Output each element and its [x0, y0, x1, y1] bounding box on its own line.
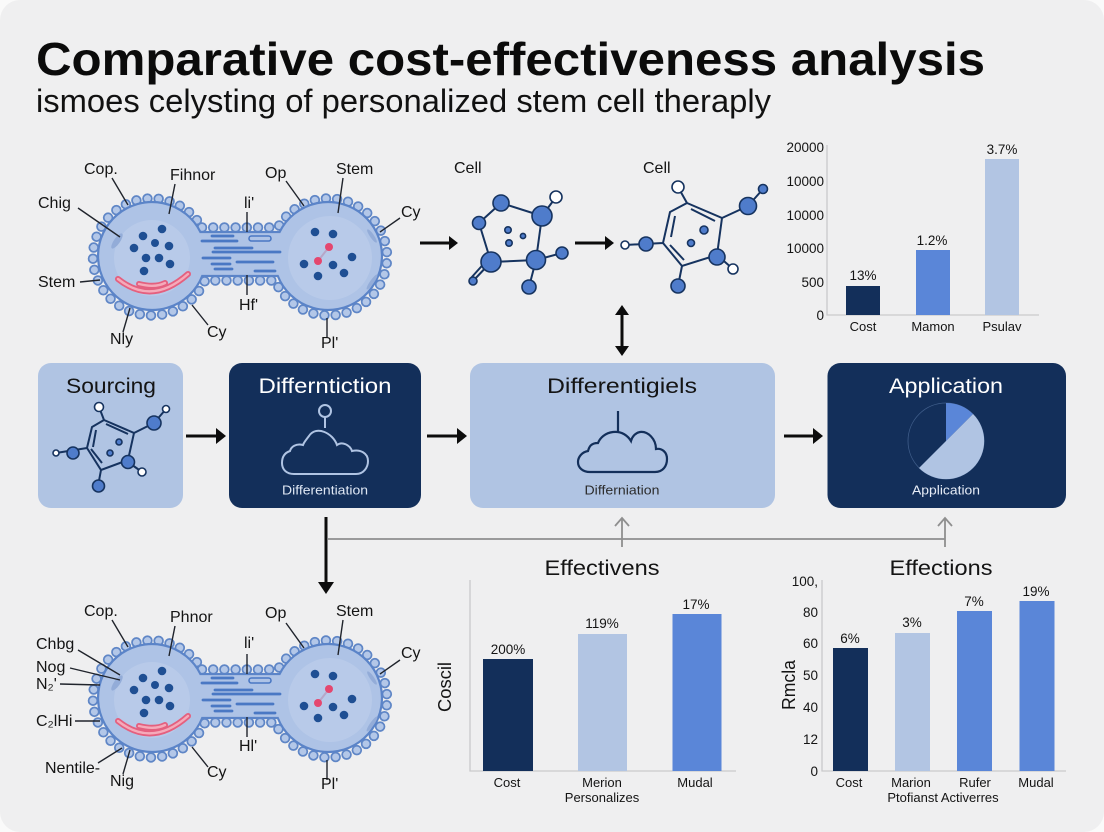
cell labels: Stem — [336, 161, 373, 178]
value labels — [849, 142, 1017, 283]
label: cell: Cell — [454, 160, 482, 177]
diagram: top stem cell — [38, 161, 421, 352]
pink crescent — [118, 274, 188, 291]
value labels — [491, 597, 710, 657]
cell labels: Cy — [401, 204, 421, 221]
y axis title: Rmcla — [779, 659, 799, 710]
cell labels: Nog — [36, 659, 65, 676]
leader lines — [78, 178, 400, 338]
cell labels: Stem — [336, 603, 373, 620]
value labels: 1.2% — [917, 233, 947, 248]
category labels: Cost — [494, 775, 521, 790]
cell labels — [38, 161, 421, 352]
arrow: molecule to molecule — [575, 236, 614, 250]
cell labels: Cy — [401, 645, 421, 662]
arrow: middle panel to application — [784, 428, 823, 444]
bar chart: top right — [786, 140, 1039, 334]
y axis labels: 100, — [792, 574, 818, 589]
cell labels: Nentile- — [45, 760, 100, 777]
y axis labels: 0 — [816, 308, 824, 323]
cell labels: Chig — [38, 195, 71, 212]
category labels — [494, 775, 713, 805]
double arrow — [615, 305, 629, 356]
category labels: Cost — [836, 775, 863, 790]
cell labels: Pl' — [321, 335, 338, 352]
arrow: differentiation down — [318, 517, 334, 594]
category labels: Mudal — [677, 775, 713, 790]
y axis labels: 500 — [801, 275, 824, 290]
y axis labels: 50 — [803, 668, 818, 683]
cell shape — [93, 640, 387, 757]
arrow: cell to molecule — [420, 236, 458, 250]
chart heading: Effections — [890, 557, 992, 580]
arrow: sourcing to differentiation — [186, 428, 226, 444]
y axis labels: 12 — [803, 732, 818, 747]
bar chart: effections — [779, 557, 1066, 805]
panel: differentiation dark — [229, 363, 421, 508]
category labels: Psulav — [982, 319, 1022, 334]
cell labels: Pl' — [321, 776, 338, 793]
feedback connector — [328, 518, 952, 547]
category labels: Marion — [891, 775, 931, 790]
value labels — [840, 584, 1050, 646]
y axis labels: 0 — [810, 764, 818, 779]
pie chart — [908, 403, 984, 479]
cell labels: C₂lHi — [36, 713, 72, 730]
category labels — [836, 775, 1054, 805]
subtitle: ismoes celysting of personalized stem cell theraply — [36, 83, 771, 119]
y axis labels: 10000 — [786, 241, 824, 256]
cell labels: Op — [265, 605, 286, 622]
icon: molecule — [53, 402, 170, 492]
panel: differentigiels — [470, 363, 775, 508]
caption: Differentiation — [282, 482, 368, 498]
cell body — [98, 202, 382, 310]
category labels — [850, 319, 1022, 334]
cell labels: N₂' — [36, 676, 57, 693]
category labels: Cost — [850, 319, 877, 334]
panel: application — [828, 363, 1066, 508]
cell labels: Cop. — [84, 603, 118, 620]
bars — [846, 159, 1019, 315]
value labels: 7% — [964, 594, 984, 609]
y axis labels: 10000 — [786, 174, 824, 189]
value labels: 119% — [585, 616, 619, 631]
leader lines — [60, 620, 400, 780]
cell labels: Hl' — [239, 738, 257, 755]
left organelle dots — [130, 225, 174, 275]
arrow: differentiation to middle panel — [427, 428, 467, 444]
y axis labels: 80 — [803, 605, 818, 620]
nuclei — [114, 216, 372, 300]
molecule two — [621, 181, 768, 293]
cell labels: Phnor — [170, 609, 213, 626]
cell labels: li' — [244, 195, 254, 212]
heading: Differentigiels — [547, 375, 697, 398]
y axis labels: 20000 — [786, 140, 824, 155]
right organelle dots — [300, 228, 356, 280]
value labels: 200% — [491, 642, 525, 657]
value labels: 13% — [849, 268, 877, 283]
membrane marks — [109, 228, 379, 291]
cell labels: Nig — [110, 773, 134, 790]
cell labels: Fihnor — [170, 167, 216, 184]
category labels: Personalizes — [565, 790, 640, 805]
cell labels: Hf' — [239, 297, 258, 314]
y axis labels: 60 — [803, 636, 818, 651]
neck filaments — [202, 236, 280, 271]
value labels: 17% — [682, 597, 710, 612]
caption: Application — [912, 482, 980, 498]
heading: Differntiction — [258, 375, 392, 398]
y axis labels: 40 — [803, 700, 818, 715]
cell labels: Cop. — [84, 161, 118, 178]
value labels: 3.7% — [987, 142, 1017, 157]
cell labels: Op — [265, 165, 286, 182]
cell labels: Chbg — [36, 636, 74, 653]
y axis labels — [792, 574, 818, 779]
value labels: 19% — [1022, 584, 1050, 599]
caption: Differniation — [584, 482, 660, 498]
value labels: 3% — [902, 615, 922, 630]
bar chart: effectivens — [435, 557, 736, 805]
category labels: Ptofianst Activerres — [887, 790, 999, 805]
cell labels — [36, 603, 421, 793]
y axis labels: 10000 — [786, 208, 824, 223]
category labels: Mudal — [1018, 775, 1054, 790]
panel: sourcing — [38, 363, 183, 508]
value labels: 6% — [840, 631, 860, 646]
icon: cloud — [282, 405, 368, 474]
cell labels: Cy — [207, 324, 227, 341]
y axis title: Coscil — [435, 662, 455, 712]
molecule one — [469, 191, 568, 294]
title: Comparative cost-effectiveness analysis — [36, 33, 985, 85]
pink organelles — [314, 243, 333, 265]
cell labels: Stem — [38, 274, 75, 291]
label: cell: Cell — [643, 160, 671, 177]
bars — [833, 601, 1054, 771]
icon: cloud — [578, 411, 667, 472]
cell labels: Cy — [207, 764, 227, 781]
cell labels: li' — [244, 635, 254, 652]
heading: Application — [889, 375, 1003, 398]
category labels: Merion — [582, 775, 622, 790]
cell labels: Nly — [110, 331, 133, 348]
diagram: bottom stem cell — [36, 603, 421, 793]
cell membrane bumps — [93, 198, 387, 315]
heading: Sourcing — [66, 375, 156, 398]
y axis labels — [786, 140, 824, 323]
bars — [483, 614, 722, 771]
category labels: Rufer — [959, 775, 992, 790]
category labels: Mamon — [911, 319, 955, 334]
chart heading: Effectivens — [544, 557, 660, 580]
